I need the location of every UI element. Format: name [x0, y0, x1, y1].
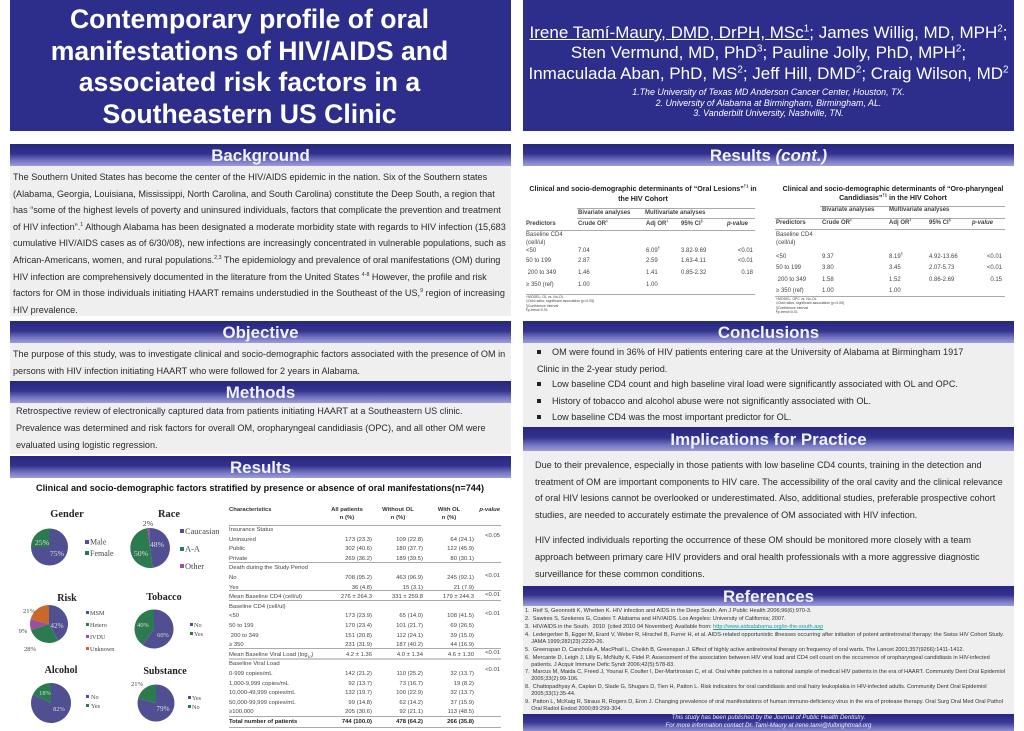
table header: All patients [331, 507, 363, 513]
table: oro-pharyngeal candidiasis determinants: Crude OR‡ [822, 218, 852, 226]
table header: n (%) [442, 515, 456, 521]
table: oral lesions determinants: 3.82-9.69 [681, 248, 706, 254]
pie: gender: Female [90, 549, 114, 558]
panel: implications text: surveillance for these common conditions. [535, 569, 705, 579]
table rows: 100 (22.9) [396, 690, 423, 696]
panel: references list: 3. HIV/AIDS in the South. 2010 [cited 2010 04 November]; Available from: http://www.aidsalabama.org/in-the-south.asp [525, 624, 823, 630]
table rows: 39 (15.0) [450, 633, 474, 639]
heading: implications for practice: Implications for Practice [670, 430, 867, 449]
pie: race: 2% [143, 519, 154, 528]
pie: gender [31, 509, 114, 566]
pie: gender: Male [90, 538, 107, 546]
title banner: associated risk factors in a [79, 67, 420, 97]
heading: references [523, 586, 1014, 606]
table: oro-pharyngeal candidiasis determinants: Multivariate analyses [889, 207, 949, 213]
panel: implications text: treatment of OM are important components to HIV care. The accessibility of the oral cavity and the clinical relevance [535, 477, 1003, 487]
authors and affiliations banner: Irene Tamí-Maury, DMD, DrPH, MSc1; James Willig, MD, MPH2; [530, 23, 1007, 42]
table rows: 112 (24.1) [397, 633, 423, 639]
panel: conclusions list: Low baseline CD4 was the most important predictor for OL. [552, 412, 791, 422]
pie: alcohol: No [91, 694, 99, 701]
table: oral lesions determinants: p-value [727, 221, 748, 227]
panel: references list: 6. Mercante D, Leigh J, Lilly E, McNulty K, Fidel P. Assessment of the association between HIV viral load and CD4 cell count on the occurrence of oropharyngeal candidiasis in HIV-infected [525, 655, 990, 661]
pie: gender: Gender [50, 509, 84, 520]
table rows: 32 (13.7) [450, 671, 474, 677]
pie: alcohol: Alcohol [45, 665, 78, 676]
pie: race: Caucasian [185, 527, 220, 536]
authors and affiliations banner: 3. Vanderbilt University, Nashville, TN. [693, 108, 844, 118]
heading: methods [10, 381, 511, 403]
table rows: Insurance Status [229, 527, 273, 533]
table: oral lesions determinants: Bivariate analyses [578, 210, 630, 216]
table rows: 32 (13.7) [450, 690, 474, 696]
table: oral lesions determinants: <0.01 [738, 258, 753, 264]
table rows: 266 (35.8) [447, 719, 474, 725]
table rows: 73 (16.7) [399, 680, 423, 686]
table: oro-pharyngeal candidiasis determinants: 0.15 [990, 277, 1002, 283]
panel: references list: 1. Reif S, Geonnotti K, Whetten K. HIV infection and AIDS in the Deep South. Am J Public Health 2006;96(6):970-3. [525, 608, 812, 614]
table: oral lesions determinants: 2.87 [578, 258, 590, 264]
panel: methods text: evaluated using logistic regression. [16, 440, 158, 450]
pie: risk: Risk [57, 593, 77, 604]
heading: references: References [723, 587, 814, 606]
table: oro-pharyngeal candidiasis determinants: 8.19¶ [889, 252, 903, 260]
table rows [229, 527, 474, 725]
pie: race: 50% [134, 549, 149, 558]
footnotes [526, 295, 594, 312]
table rows: 302 (40.6) [345, 546, 372, 552]
authors and affiliations banner: 1.The University of Texas MD Anderson Cancer Center, Houston, TX. [632, 87, 905, 97]
panel: references list: 2005;33(1):35-44. [531, 691, 576, 697]
pie: risk: MSM [90, 610, 105, 617]
table title [782, 185, 1003, 202]
heading: background: Background [211, 146, 310, 165]
heading: implications for practice [523, 427, 1014, 451]
pie: risk [19, 593, 114, 653]
table: oro-pharyngeal candidiasis determinants: 200 to 349 [778, 277, 806, 283]
table: oral lesions determinants: 7.04 [578, 248, 590, 254]
table: oro-pharyngeal candidiasis determinants: Adj OR‡ [889, 218, 911, 226]
table: oro-pharyngeal candidiasis determinants: 1.52 [889, 277, 901, 283]
table title [529, 184, 757, 203]
table: oro-pharyngeal candidiasis determinants: (cell/ul) [776, 240, 795, 246]
heading: objective [10, 321, 511, 343]
panel: objective text: The purpose of this study, was to investigate clinical and socio-demographic factors associated with the presence of OM in [13, 349, 505, 359]
footnotes: ‡Odd ratios, significant association (p<0.05) [776, 301, 844, 305]
p-values: <0.01 [485, 667, 500, 673]
pie: substance: 79% [156, 705, 170, 713]
table rows: ≥ 350 [229, 642, 244, 648]
pie: risk: IVDU [90, 634, 106, 641]
heading: background [10, 144, 511, 166]
pie: tobacco: No [194, 622, 202, 629]
table: oral lesions determinants: 6.09¶ [646, 246, 660, 254]
pie: gender: 25% [35, 538, 50, 547]
footer: publication note [523, 714, 1014, 731]
table header: With OL [438, 507, 460, 513]
figure title: factors by oral manifestations: Clinical and socio-demographic factors stratified by presence or absence of oral manifestations(n=744) [36, 483, 484, 493]
table rows: 36 (4.8) [352, 585, 372, 591]
pie: substance: Substance [143, 666, 187, 677]
table: oral lesions determinants: <0.01 [738, 248, 753, 254]
pie: risk: 42% [50, 622, 64, 630]
pie: tobacco: Yes [194, 631, 204, 638]
table: oral lesions determinants: 95% CI§ [681, 219, 703, 227]
table: oral lesions determinants: Crude OR‡ [578, 219, 608, 227]
panel: references list: patients. J Acquir Immune Defic Syndr 2006;42(5):578-83. [531, 662, 675, 668]
table rows: 708 (95.2) [345, 575, 372, 581]
table: oral lesions determinants: Multivariate analyses [645, 210, 705, 216]
title banner: Contemporary profile of oral [70, 4, 429, 34]
p-values: <0.01 [485, 650, 500, 656]
table title: the HIV Cohort [618, 195, 668, 203]
panel: references list: Oral Radiol Endod 2000;89:299-304. [531, 706, 622, 712]
table rows: <50 [229, 613, 239, 619]
table: oro-pharyngeal candidiasis determinants: 50 to 199 [776, 265, 801, 271]
pie: tobacco: 40% [137, 622, 150, 629]
table: oral lesions determinants: 1.46 [578, 270, 590, 276]
panel: conclusions list: Low baseline CD4 count and high baseline viral load were significantly associated with OL and OPC. [552, 379, 958, 389]
table rows: Uninsured [229, 537, 256, 543]
pie: substance: No [192, 704, 200, 711]
table rows: 478 (64.2) [396, 719, 423, 725]
panel: implications text: approach between primary care HIV providers and oral health professionals with a more aggressive diagnostic [535, 552, 980, 562]
panel: background text: of HIV infection”.1 Although Alabama has been designated a moderate morbidity state with regards to HIV infection (15,683 [13, 222, 506, 232]
table rows: Baseline CD4 (cell/ul) [229, 604, 286, 610]
table rows: 21 (7.9) [454, 585, 474, 591]
table rows: 245 (92.1) [447, 575, 474, 581]
panel: background text: factors for OM in those individuals initiating HAART remains understudied in the Southeast of the US,9 region of increasing [13, 288, 505, 298]
pie: gender: 75% [50, 549, 65, 558]
panel: background text: (Alabama, Georgia, Louisiana, Mississippi, North Carolina, and South Carolina) constitute the Deep South, a region that [13, 189, 495, 199]
panel: objective text [10, 343, 511, 381]
panel: methods text [10, 403, 511, 454]
pie: alcohol: Yes [91, 703, 101, 710]
table: oro-pharyngeal candidiasis determinants: 1.00 [822, 288, 834, 294]
table rows: 113 (48.5) [448, 709, 474, 715]
table: oral lesions determinants [526, 184, 757, 312]
heading: objective: Objective [222, 323, 299, 342]
panel: references list: 2. Sawires S, Szekeres G, Coates T. Alabama and HIV/AIDS. Los Angeles: University of California; 2007. [525, 616, 786, 622]
p-values: <0.05 [485, 533, 500, 539]
panel: implications text: HIV infected individuals reporting the occurrence of these OM should be monitored more closely with a team [535, 535, 971, 545]
table: oro-pharyngeal candidiasis determinants [775, 185, 1005, 314]
pie: risk: 28% [24, 646, 37, 653]
table: oral lesions determinants: 1.00 [646, 282, 658, 288]
table header: n (%) [391, 515, 405, 521]
pie chart group [18, 509, 220, 723]
table rows: 4.6 ± 1.30 [448, 652, 474, 658]
table: oral lesions determinants: Baseline CD4 [526, 232, 563, 238]
panel: background text: African-Americans, women, and rural populations.2,3 The epidemiology and prevalence of oral manifestations (OM) during [13, 255, 500, 265]
panel: references list: 2005;33(2):99-106. [531, 676, 579, 682]
table rows: 99 (14.8) [348, 700, 372, 706]
panel: background text [10, 166, 511, 316]
pie: tobacco: Tobacco [146, 592, 182, 603]
table rows: 173 (23.3) [345, 537, 372, 543]
table rows: 142 (21.2) [345, 671, 372, 677]
panel: references list: 8. Chattopadhyay A, Caplan D, Slade G, Shugars D, Tien H, Patton L. Risk indicators for oral candidiasis and oral hairy leukoplakia in HIV-infected adults. Community Dent Oral Epidemiol [525, 684, 987, 690]
panel: implications text: of oral HIV lesions cannot be overlooked or underestimated. Also, additional studies, preferable prospective cohort [535, 493, 995, 503]
table rows: 132 (19.7) [345, 690, 372, 696]
footnotes: ‡Odd ratios, significant association (p<0.05) [526, 299, 594, 303]
table rows: 179 ± 244.3 [443, 594, 474, 600]
footnotes: †MODEL: OL vs. No-OL [526, 295, 564, 299]
authors and affiliations banner: 2. University of Alabama at Birmingham, Birmingham, AL. [656, 98, 881, 108]
table: oro-pharyngeal candidiasis determinants: ≥ 350 (ref) [776, 288, 804, 294]
table: oral lesions determinants: <50 [526, 248, 536, 254]
pie: race: A-A [185, 544, 200, 554]
table rows: 269 (36.2) [345, 556, 372, 562]
authors and affiliations banner: Sten Vermund, MD, PhD3; Pauline Jolly, PhD, MPH2; [571, 43, 966, 62]
panel: references list: 7. Marcus M, Maida C, Freed J, Younai F, Coulter I, Der-Martirosian C, et al. Oral white patches in a national sample of medical HIV patients in the era of HAART. Community Dent Oral Epidemiol [525, 669, 1005, 675]
panel: references list [523, 606, 1014, 714]
authors and affiliations banner [523, 0, 1014, 131]
table: oral lesions determinants: (cell/ul) [526, 240, 545, 246]
table: oro-pharyngeal candidiasis determinants: <0.01 [987, 254, 1002, 260]
table: oro-pharyngeal candidiasis determinants: p-value [972, 220, 993, 226]
table rows: 744 (100.0) [342, 719, 372, 725]
table title: Candidiasis”†1 in the HIV Cohort [839, 193, 947, 202]
title banner: manifestations of HIV/AIDS and [51, 36, 448, 66]
table rows: 50,000-99,999 copies/mL [229, 700, 295, 706]
pie: risk: Hetero [90, 622, 107, 629]
pie: race: Other [185, 562, 204, 571]
pie: race: Race [158, 509, 180, 520]
table rows: Mean Baseline Viral Load (log10) [229, 652, 313, 659]
pie: race [130, 509, 220, 571]
table: oral lesions determinants: 1.63-4.11 [681, 258, 706, 264]
panel: methods text: Retrospective review of electronically captured data from patients initiating HAART at a Southeastern US clinic. [16, 406, 462, 416]
table: oro-pharyngeal candidiasis determinants: 3.45 [889, 265, 901, 271]
table rows: 44 (16.9) [450, 642, 474, 648]
table: oro-pharyngeal candidiasis determinants: <50 [776, 254, 786, 260]
table rows: 122 (45.9) [447, 546, 474, 552]
panel: conclusions list: Clinic in the 2-year study period. [537, 364, 667, 374]
table rows: 92 (13.7) [348, 680, 372, 686]
panel: background text: The Southern United States has become the center of the HIV/AIDS epidemic in the nation. Six of the Southern states [13, 172, 487, 182]
table rows: Baseline Viral Load [229, 661, 280, 667]
table rows: 180 (37.7) [396, 546, 423, 552]
table rows: 187 (40.2) [396, 642, 423, 648]
pie: risk: 21% [23, 608, 36, 615]
table: oro-pharyngeal candidiasis determinants: 4.92-13.66 [929, 254, 958, 260]
heading: methods: Methods [226, 383, 295, 402]
table: oro-pharyngeal candidiasis determinants: 9.37 [822, 254, 834, 260]
panel: background text: HIV infection are comprehensively documented in the literature from the United States 4-8 However, the profile and risk [13, 272, 487, 282]
panel: references list: 4. Ledergerber B, Egger M, Erard V, Weber R, Hirschel B, Furrer H, et al. AIDS-related opportunistic illnesses occurring after initiation of potent antiretroviral therapy: the Swiss HIV Cohort Study. [525, 632, 1004, 638]
table: oral lesions determinants: ≥ 350 (ref) [526, 282, 554, 288]
table rows: 463 (96.9) [396, 575, 423, 581]
table: oro-pharyngeal candidiasis determinants: 1.58 [822, 277, 834, 283]
table: characteristics by oral lesion status [229, 507, 501, 728]
footer: publication note: This study has been published by the Journal of Public Health Dentistry. [672, 714, 865, 721]
panel: background text: cumulative HIV/AIDS cases as of 6/30/08), new infections are increasingly concentrated in vulnerable populations, such as [13, 238, 506, 248]
footnotes: ¶p-trend<0.01 [776, 310, 798, 314]
table rows: 189 (39.5) [396, 556, 423, 562]
table header: n (%) [340, 515, 354, 521]
footer: publication note: For more information contact Dr. Tami-Maury at irene.tami@fulbrightmail.org [666, 722, 871, 729]
panel: conclusions list: OM were found in 36% of HIV patients entering care at the University of Alabama at Birmingham 1917 [552, 347, 963, 357]
p-values [485, 533, 500, 673]
table: oro-pharyngeal candidiasis determinants: 95% CI§ [929, 218, 951, 226]
table: oral lesions determinants: Predictors [526, 221, 556, 227]
table header [229, 507, 500, 521]
table rows: 15 (3.1) [403, 585, 423, 591]
table rows: 0-999 copies/mL [229, 671, 273, 677]
table title: Clinical and socio-demographic determinants of “Oro-pharyngeal [783, 185, 1003, 193]
table rows: 4.0 ± 1.34 [397, 652, 423, 658]
pie: substance: 21% [131, 681, 144, 688]
table rows: 65 (14.0) [399, 613, 423, 619]
panel: objective text: persons with HIV infection initiating HAART who were followed for 2 years in Alabama. [13, 366, 360, 376]
table rows: Death during the Study Period [229, 565, 308, 571]
table rows: 80 (30.1) [450, 556, 474, 562]
title banner [10, 0, 511, 131]
table: oral lesions determinants: 0.18 [741, 270, 753, 276]
panel: conclusions list: History of tobacco and alcohol abuse were not significantly associated with OL. [552, 396, 871, 406]
pie: substance: Yes [192, 695, 202, 702]
table rows: 200 to 349 [231, 633, 258, 639]
table rows: ≥100,000 [229, 709, 254, 715]
table rows: 101 (21.7) [396, 623, 423, 629]
table: oro-pharyngeal candidiasis determinants: 3.80 [822, 265, 834, 271]
pie: alcohol: 18% [39, 690, 52, 697]
p-values: <0.01 [485, 573, 500, 579]
pie: alcohol: 82% [53, 706, 66, 713]
table rows: 205 (30.6) [345, 709, 372, 715]
pie: substance [131, 666, 202, 722]
footnotes: ¶p-trend<0.01 [526, 308, 548, 312]
table: oral lesions determinants: 2.59 [646, 258, 658, 264]
table rows: 4.2 ± 1.36 [346, 652, 372, 658]
table: oral lesions determinants: 1.41 [646, 270, 658, 276]
table rows: 92 (21.1) [399, 709, 423, 715]
heading: conclusions [523, 321, 1014, 343]
table rows: 109 (22.8) [396, 537, 423, 543]
table rows: No [229, 575, 237, 581]
table rows: 10,000-49,999 copies/mL [229, 690, 295, 696]
panel: references list: JAMA 1999;282(23):2220-26. [531, 639, 604, 645]
title banner: Southeastern US Clinic [102, 99, 397, 129]
table rows: Mean Baseline CD4 (cell/ul) [229, 594, 302, 600]
table rows: 69 (26.5) [450, 623, 474, 629]
table header: p-value [479, 507, 500, 513]
pie: risk: Unknown [90, 646, 114, 653]
panel: references list: 9. Patton L, McKaig R, Straus R, Rogers D, Eron J. Changing prevalence of oral manifestations of human immuno-deficiency virus in the era of protease therapy. Oral Surg Oral Med Oral Pathol [525, 699, 1003, 705]
footnotes: §Confidence Interval [526, 304, 558, 308]
pie: tobacco [134, 592, 204, 648]
footnotes [776, 297, 844, 314]
p-values: <0.01 [485, 592, 500, 598]
table rows: 108 (41.5) [447, 613, 474, 619]
table title: Clinical and socio-demographic determinants of “Oral Lesions”†1 in [529, 184, 757, 193]
table: oro-pharyngeal candidiasis determinants: 2.07-5.73 [929, 265, 954, 271]
table rows: Total number of patients [229, 719, 297, 725]
heading: results continued [523, 144, 1014, 166]
p-values: <0.01 [485, 611, 500, 617]
table: oral lesions determinants: 50 to 199 [526, 258, 551, 264]
table rows: Yes [229, 585, 239, 591]
panel: background text: has “some of the highest levels of poverty and uninsured individuals, factors that complicate the prevention and treatment [13, 205, 501, 215]
panel: methods text: Prevalence was determined and risk factors for overall OM, oropharyngeal candidiasis (OPC), and all other OM were [16, 423, 486, 433]
table: oral lesions determinants: Adj OR‡ [646, 219, 668, 227]
table: oral lesions determinants: 0.85-2.32 [681, 270, 706, 276]
authors and affiliations banner: Inmaculada Aban, PhD, MS2; Jeff Hill, DMD2; Craig Wilson, MD2 [528, 64, 1009, 83]
pie: risk: 9% [19, 628, 28, 635]
heading: results continued: Results (cont.) [710, 146, 827, 165]
table: oro-pharyngeal candidiasis determinants: Bivariate analyses [822, 207, 874, 213]
table: oro-pharyngeal candidiasis determinants: Predictors [776, 220, 806, 226]
heading: results: Results [230, 458, 291, 477]
heading: results [10, 456, 511, 478]
table header: Without OL [382, 507, 414, 513]
pie: tobacco: 60% [157, 632, 170, 639]
table rows: 331 ± 259.8 [392, 594, 423, 600]
table: oro-pharyngeal candidiasis determinants: 1.00 [889, 288, 901, 294]
table rows: 231 (31.9) [345, 642, 372, 648]
table rows: 64 (24.1) [450, 537, 474, 543]
footnotes: †MODEL: OPC vs. No-OL [776, 297, 817, 301]
table rows: 37 (15.9) [450, 700, 474, 706]
table: oral lesions determinants: 200 to 349 [528, 270, 556, 276]
table rows: 1,000-9,999 copies/mL [229, 680, 289, 686]
footnotes: §Confidence Interval [776, 306, 808, 310]
table rows: 62 (14.2) [399, 700, 423, 706]
panel: references list: 5. Greenspan D, Canchola A, MacPhail L, Cheikh B, Greenspan J. Effect of highly active antiretroviral therapy on frequency of oral warts. The Lancet 2001;357(9266):1411-1412. [525, 647, 964, 653]
table: oro-pharyngeal candidiasis determinants: <0.01 [987, 265, 1002, 271]
table rows: 19 (8.2) [454, 680, 474, 686]
table header: Characteristics [229, 507, 272, 513]
pie: race: 48% [150, 540, 165, 549]
table rows: 276 ± 264.3 [341, 594, 372, 600]
heading: conclusions: Conclusions [718, 323, 819, 342]
panel: implications text: Due to their prevalence, especially in those patients with low baseline CD4 counts, training in the detection and [535, 460, 982, 470]
table rows: 170 (23.4) [345, 623, 372, 629]
table: oro-pharyngeal candidiasis determinants: 0.86-2.69 [929, 277, 954, 283]
table rows: 173 (23.9) [345, 613, 372, 619]
table rows: Public [229, 546, 245, 552]
panel: conclusions list [523, 343, 1014, 427]
pie: alcohol [31, 665, 101, 723]
table rows: 110 (25.2) [397, 671, 423, 677]
table rows: Private [229, 556, 247, 562]
panel: background text: HIV prevalence. [13, 305, 78, 315]
table rows: 50 to 199 [229, 623, 254, 629]
table: oro-pharyngeal candidiasis determinants: Baseline CD4 [776, 232, 813, 238]
table rows: 151 (20.8) [345, 633, 372, 639]
panel: implications text: studies, are needed to accurately estimate the prevalence of OM associated with HIV infection. [535, 510, 917, 520]
panel: implications text [523, 451, 1014, 586]
table: oral lesions determinants: 1.00 [578, 282, 590, 288]
